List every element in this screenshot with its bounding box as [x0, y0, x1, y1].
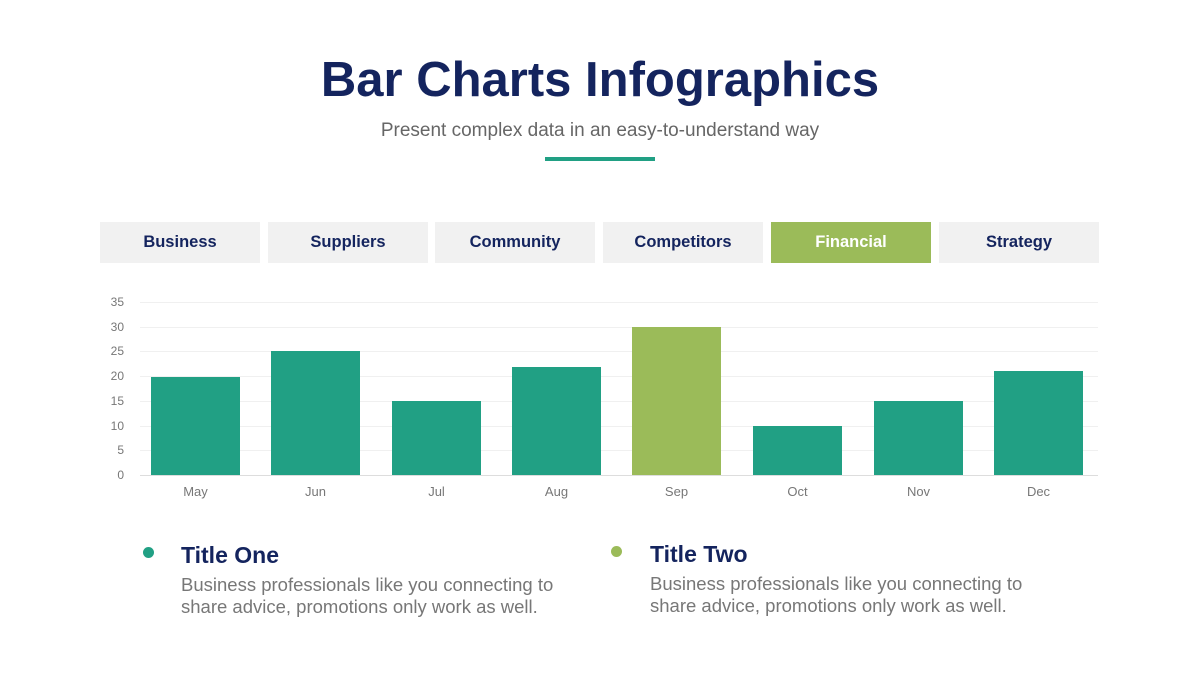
text block: title two — [611, 541, 1022, 616]
subtitle: Present complex data in an easy-to-understand way — [381, 120, 819, 141]
text block: title one: Business professionals like you connecting to share advice, promotions only work as well. — [181, 574, 553, 617]
text block: title two: Business professionals like you connecting to share advice, promotions only work as well. — [650, 573, 1022, 616]
text block: title one: Title One — [181, 542, 279, 568]
bullet: green — [611, 546, 622, 557]
tabs — [100, 222, 1099, 263]
bar chart: Jun — [305, 484, 326, 499]
bar chart: 10 — [111, 419, 124, 433]
bullet: teal — [143, 547, 154, 558]
bar chart: Aug — [545, 484, 568, 499]
bar chart: 20 — [111, 369, 124, 383]
tab: strategy: Strategy — [986, 233, 1052, 251]
bar chart: 5 — [117, 443, 124, 457]
tab: community — [435, 222, 595, 263]
tab: competitors: Competitors — [634, 233, 732, 251]
tab: financial (active): Financial — [815, 233, 887, 251]
bar chart: Jul — [428, 484, 445, 499]
bar chart: Oct — [787, 484, 808, 499]
title: Bar Charts Infographics — [321, 53, 879, 107]
bar chart: 25 — [111, 344, 124, 358]
tab: financial (active) — [771, 222, 931, 263]
tab: community: Community — [470, 233, 560, 251]
tab: business — [100, 222, 260, 263]
bar chart: 35 — [111, 295, 124, 309]
bar chart: May — [183, 484, 208, 499]
text block: title two: Title Two — [650, 541, 748, 567]
tab: suppliers: Suppliers — [310, 233, 386, 251]
bar chart: 15 — [111, 394, 124, 408]
bar chart: 30 — [111, 320, 124, 334]
tab: suppliers — [268, 222, 428, 263]
bar chart — [111, 295, 1098, 499]
bar chart: Dec — [1027, 484, 1050, 499]
bar chart: 0 — [117, 468, 124, 482]
bar chart: Sep — [665, 484, 688, 499]
bar chart: Nov — [907, 484, 930, 499]
tab: competitors — [603, 222, 763, 263]
tab: business: Business — [143, 233, 217, 251]
title underline — [545, 157, 655, 161]
text block: title one — [143, 542, 553, 617]
tab: strategy — [939, 222, 1099, 263]
